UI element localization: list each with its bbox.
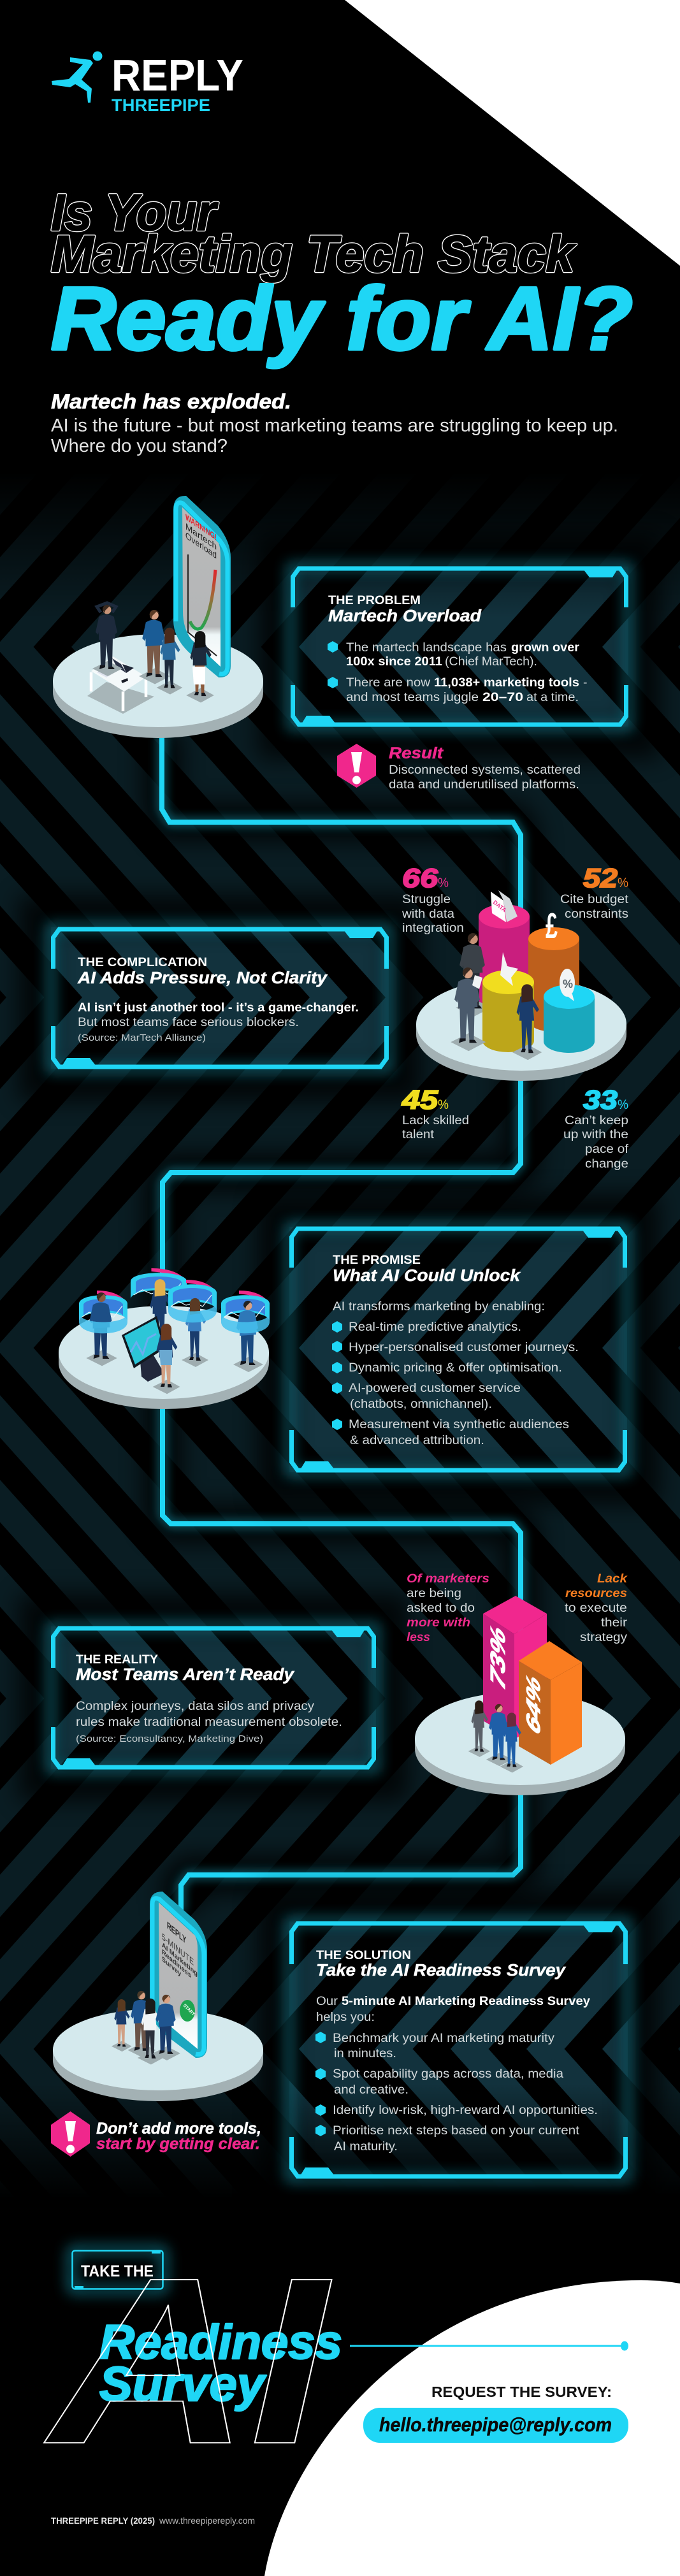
illustration: AI screens platform bbox=[59, 1268, 270, 1409]
heading: Martech Overload bbox=[328, 607, 482, 625]
illustration: martech overload platform bbox=[53, 496, 263, 738]
take the box bbox=[71, 2250, 164, 2290]
illustration: blockers cylinder chart bbox=[416, 890, 626, 1081]
panel: the problem bbox=[275, 551, 644, 742]
team bbox=[468, 1700, 523, 1772]
bullet list bbox=[328, 640, 588, 704]
intro text: Martech has exploded. bbox=[51, 390, 291, 413]
panel: the complication bbox=[35, 911, 405, 1085]
body text: (Source: MarTech Alliance) bbox=[78, 1032, 206, 1043]
pointer line bbox=[350, 2341, 628, 2350]
stat text: 64% lack resources bbox=[565, 1572, 628, 1644]
connector line bbox=[162, 733, 521, 1912]
stat: 33%: pace of bbox=[585, 1142, 629, 1156]
stat: 66%: integration bbox=[402, 921, 464, 935]
stat: 52% bbox=[560, 863, 629, 921]
bullet list: at a time. bbox=[526, 690, 579, 704]
bullet list: AI maturity. bbox=[334, 2139, 398, 2153]
body text bbox=[78, 1001, 359, 1043]
heading: THE PROMISE bbox=[333, 1253, 421, 1267]
bullet list: grown over bbox=[511, 640, 579, 655]
stat: 45%: Lack skilled bbox=[402, 1113, 469, 1127]
bullet list: (chatbots, omnichannel). bbox=[350, 1397, 492, 1411]
man behind bbox=[456, 933, 491, 1017]
phone with survey: REPLY bbox=[167, 1919, 186, 1946]
white corner triangle bbox=[345, 0, 680, 266]
request the survey: REQUEST THE SURVEY: bbox=[431, 2384, 612, 2400]
bullet list: Benchmark your AI marketing maturity bbox=[333, 2031, 554, 2045]
yellow cylinder bbox=[482, 952, 534, 1052]
bullet list: 100x since 2011 bbox=[346, 655, 442, 669]
bullet list: Our bbox=[316, 1994, 338, 2008]
heading bbox=[328, 593, 482, 625]
pink cylinder: DATA bbox=[492, 899, 508, 913]
stat: 52%: Cite budget bbox=[560, 892, 629, 906]
body text: Complex journeys, data silos and privacy bbox=[76, 1699, 314, 1713]
team bbox=[112, 1991, 180, 2065]
platform bbox=[53, 634, 263, 738]
body text: But most teams face serious blockers. bbox=[78, 1015, 299, 1029]
stat: 33%: 33 bbox=[583, 1085, 618, 1115]
callout: result: data and underutilised platforms. bbox=[389, 778, 579, 792]
bullet list: helps you: bbox=[316, 2010, 375, 2024]
footer credit bbox=[51, 2515, 255, 2526]
stat: 52%: 52 bbox=[583, 863, 618, 893]
heading: THE REALITY bbox=[76, 1653, 158, 1667]
stat: 66%: 66 bbox=[402, 863, 438, 893]
heading bbox=[77, 955, 328, 987]
platform bbox=[53, 2009, 263, 2101]
title: Marketing Tech Stack bbox=[51, 226, 577, 283]
body text: AI isn’t just another tool - it’s a game-changer. bbox=[78, 1001, 359, 1015]
callout: don't add more tools bbox=[51, 2111, 261, 2157]
callout: don't add more tools: start by getting clear. bbox=[96, 2135, 260, 2153]
orange cylinder bbox=[528, 905, 579, 1032]
bullet list: Identify low-risk, high-reward AI opportunities. bbox=[333, 2103, 598, 2117]
bullet list: 11,038+ marketing tools bbox=[434, 676, 579, 690]
take the box: TAKE THE bbox=[81, 2262, 154, 2280]
stat text: 64% lack resources: Lack bbox=[597, 1572, 628, 1586]
stat: 45%: % bbox=[438, 1097, 449, 1112]
team bbox=[92, 603, 214, 702]
people bbox=[451, 967, 542, 1060]
phone with warning bbox=[173, 496, 231, 677]
phone with warning: Overload bbox=[185, 530, 217, 561]
bullet list: (Chief MarTech). bbox=[445, 655, 537, 669]
logo: Reply Threepipe bbox=[52, 50, 243, 115]
stat text: 64% lack resources: to execute bbox=[565, 1601, 627, 1615]
bullet list: 20–70 bbox=[482, 690, 523, 704]
heading bbox=[333, 1253, 521, 1285]
platform bbox=[416, 978, 626, 1081]
callout: result bbox=[337, 744, 581, 792]
stat text: 73% marketers: are being bbox=[407, 1586, 461, 1600]
orange cylinder: £ bbox=[546, 905, 558, 946]
heading bbox=[76, 1653, 295, 1684]
bullet list: - bbox=[583, 676, 588, 690]
callout: result: Disconnected systems, scattered bbox=[389, 763, 581, 777]
heading: THE SOLUTION bbox=[316, 1948, 411, 1962]
stat: 45% bbox=[401, 1085, 469, 1141]
callout: don't add more tools: Don’t add more tools, bbox=[96, 2120, 261, 2138]
title: Ready for AI? bbox=[51, 268, 633, 368]
stat: 33%: Can’t keep bbox=[565, 1113, 628, 1127]
intro text: Where do you stand? bbox=[51, 436, 228, 456]
title bbox=[51, 184, 633, 368]
intro text bbox=[51, 390, 618, 456]
panel: the promise bbox=[273, 1211, 643, 1488]
heading: THE PROBLEM bbox=[328, 593, 421, 607]
readiness survey heading: Survey bbox=[99, 2357, 267, 2412]
intro text: AI is the future - but most marketing teams are struggling to keep up. bbox=[51, 416, 618, 436]
title: Is Your bbox=[51, 184, 219, 242]
stat text: 73% marketers: less bbox=[407, 1630, 430, 1644]
heading: AI Adds Pressure, Not Clarity bbox=[77, 969, 328, 987]
stat: 52%: constraints bbox=[565, 907, 628, 921]
heading: Most Teams Aren’t Ready bbox=[76, 1666, 295, 1684]
illustration: bar prisms platform bbox=[415, 1596, 625, 1795]
phone with survey: 5-MINUTE bbox=[162, 1931, 194, 1968]
bullet list: AI-powered customer service bbox=[349, 1381, 521, 1395]
request the survey: hello.threepipe@reply.com bbox=[379, 2413, 612, 2436]
bullet list: Prioritise next steps based on your current bbox=[333, 2124, 580, 2138]
phone with survey: AI Marketing bbox=[162, 1940, 198, 1978]
bullet list: 5-minute AI Marketing Readiness Survey bbox=[342, 1994, 590, 2008]
phone with survey bbox=[150, 1892, 207, 2058]
bullet list bbox=[315, 1994, 598, 2153]
stat text: 73% marketers: Of marketers bbox=[407, 1572, 489, 1586]
stat: 66%: % bbox=[438, 876, 449, 890]
heading: THE COMPLICATION bbox=[78, 955, 207, 969]
bullet list: Dynamic pricing & offer optimisation. bbox=[349, 1361, 562, 1375]
body text: (Source: Econsultancy, Marketing Dive) bbox=[76, 1733, 263, 1744]
bullet list: and creative. bbox=[334, 2083, 409, 2097]
holographic screens bbox=[79, 1268, 270, 1372]
stat: 52%: % bbox=[618, 876, 628, 890]
panel: the reality bbox=[35, 1610, 392, 1785]
logo: Reply Threepipe: THREEPIPE bbox=[112, 96, 210, 115]
phone with survey: START bbox=[182, 2003, 196, 2017]
stat text: 64% lack resources: resources bbox=[565, 1586, 627, 1600]
pink cylinder bbox=[479, 890, 530, 1012]
stat text: 73% marketers bbox=[407, 1572, 489, 1644]
phone with survey: Readiness bbox=[162, 1947, 191, 1979]
orange prism 64%: 64% bbox=[523, 1670, 544, 1739]
stat: 33%: change bbox=[585, 1157, 628, 1171]
request the survey bbox=[363, 2384, 628, 2443]
outlined AI: AI bbox=[41, 2228, 332, 2493]
stat: 33%: up with the bbox=[563, 1127, 628, 1141]
bullet list: in minutes. bbox=[334, 2046, 396, 2060]
stat: 33%: % bbox=[618, 1097, 628, 1112]
stat text: 73% marketers: more with bbox=[407, 1616, 470, 1630]
stat text: 64% lack resources: strategy bbox=[580, 1630, 627, 1644]
white curved footer background bbox=[264, 2280, 680, 2576]
body text: rules make traditional measurement obsolete. bbox=[76, 1715, 342, 1729]
callout: result: Result bbox=[389, 744, 444, 762]
heading bbox=[316, 1948, 567, 1979]
bullet list: Real-time predictive analytics. bbox=[349, 1320, 521, 1334]
heading: What AI Could Unlock bbox=[333, 1267, 521, 1285]
touch kiosk bbox=[122, 1316, 180, 1394]
platform bbox=[59, 1306, 269, 1409]
platform bbox=[415, 1692, 625, 1795]
bullet list bbox=[332, 1299, 579, 1447]
logo: Reply Threepipe: REPLY bbox=[112, 50, 243, 100]
orange prism 64% bbox=[519, 1641, 582, 1765]
bullet list: Hyper-personalised customer journeys. bbox=[349, 1340, 579, 1354]
bullet list: There are now bbox=[346, 676, 431, 690]
stat: 45%: talent bbox=[402, 1127, 435, 1141]
phone with warning: WARNING! bbox=[185, 512, 217, 543]
cyan cylinder: % bbox=[563, 978, 573, 990]
phone with survey: Survey bbox=[162, 1954, 182, 1979]
readiness survey heading: Readiness bbox=[99, 2315, 342, 2370]
bullet list: The martech landscape has bbox=[346, 640, 507, 655]
stat: 66%: Struggle bbox=[402, 892, 451, 906]
heading: Take the AI Readiness Survey bbox=[316, 1962, 567, 1979]
desk with laptop bbox=[87, 656, 154, 714]
stat: 33% bbox=[563, 1085, 629, 1171]
illustration: survey phone platform bbox=[53, 1892, 263, 2101]
readiness survey heading bbox=[99, 2315, 342, 2412]
footer credit: THREEPIPE REPLY (2025) bbox=[51, 2515, 155, 2526]
body text bbox=[76, 1699, 342, 1744]
bullet list: Measurement via synthetic audiences bbox=[349, 1417, 569, 1431]
title: Is Your bbox=[51, 184, 219, 242]
bullet list: Spot capability gaps across data, media bbox=[333, 2067, 563, 2081]
stat text: 64% lack resources: their bbox=[601, 1616, 628, 1630]
stat: 66%: with data bbox=[401, 907, 454, 921]
pink prism 73%: 73% bbox=[487, 1621, 509, 1695]
phone with warning: Martech bbox=[185, 521, 217, 553]
cyan cylinder bbox=[544, 969, 595, 1053]
call to action: take the AI readiness survey bbox=[41, 2228, 342, 2493]
pink prism 73% bbox=[483, 1596, 547, 1739]
bullet list: & advanced attribution. bbox=[350, 1433, 484, 1447]
bullet list: and most teams juggle bbox=[346, 690, 479, 704]
stat: 66% bbox=[401, 863, 464, 935]
stat text: 73% marketers: asked to do bbox=[407, 1601, 475, 1615]
panel: the solution bbox=[273, 1906, 644, 2194]
bullet list: AI transforms marketing by enabling: bbox=[333, 1299, 545, 1313]
title: Marketing Tech Stack bbox=[51, 226, 577, 283]
stat: 45%: 45 bbox=[401, 1085, 438, 1115]
footer credit: www.threepipereply.com bbox=[159, 2515, 255, 2526]
